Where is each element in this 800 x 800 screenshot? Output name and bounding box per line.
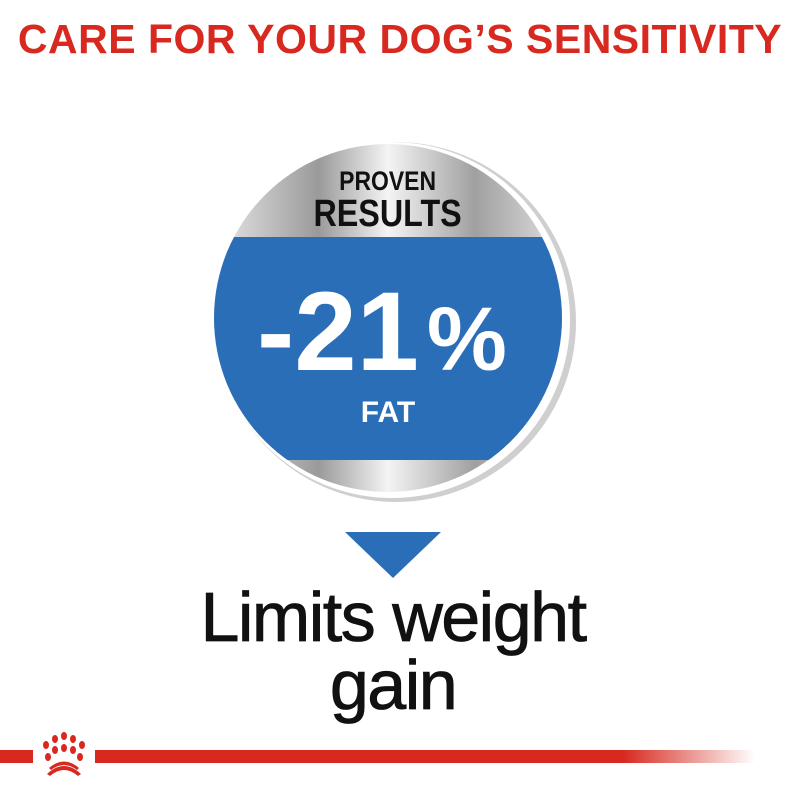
footer bar with crown logo [0, 732, 750, 776]
headline text: Limits weight [200, 578, 586, 656]
headline text: gain [330, 646, 456, 724]
badge: proven results: RESULTS [313, 193, 462, 235]
badge: proven results: PROVEN [339, 166, 436, 196]
badge: proven results: -21% [257, 269, 507, 394]
badge: proven results [214, 142, 576, 502]
icon: crown [43, 732, 85, 776]
title: CARE FOR YOUR DOG’S SENSITIVITY [18, 16, 782, 62]
headline text [200, 578, 587, 724]
arrow down [345, 532, 441, 578]
badge: proven results: FAT [361, 396, 415, 429]
